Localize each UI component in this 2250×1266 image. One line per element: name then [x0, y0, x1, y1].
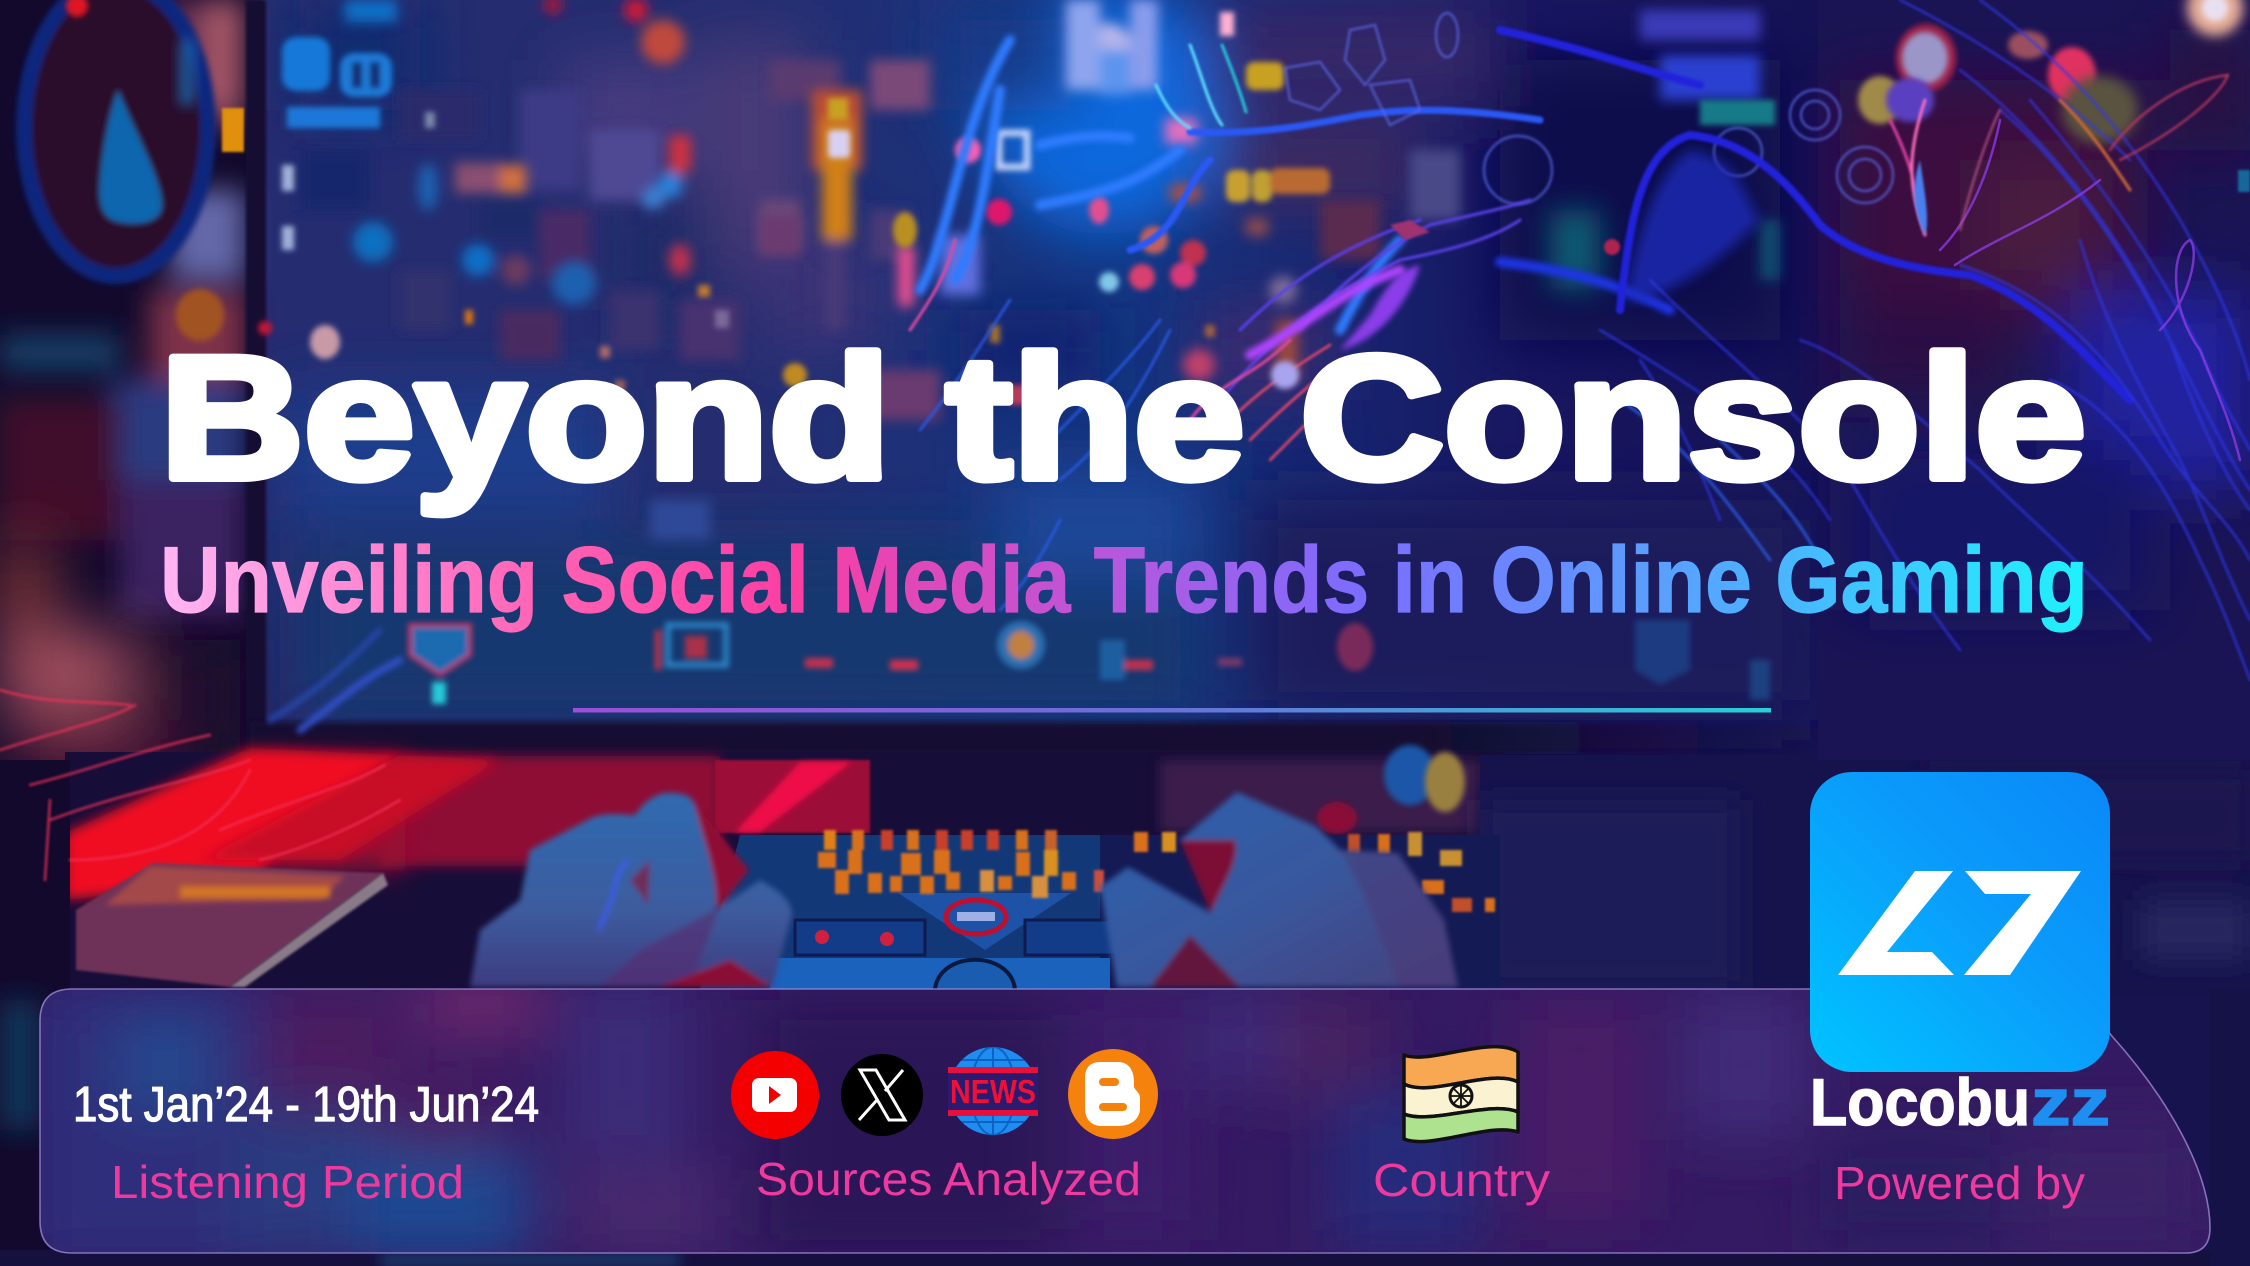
- maroon area at the upper right: [1818, 0, 2250, 760]
- label: sources analyzed: Sources Analyzed: [756, 1153, 1141, 1205]
- book on desk: [76, 863, 388, 987]
- icon: blogger: [1068, 1049, 1158, 1139]
- light strands: [0, 0, 2250, 880]
- right side desk: [1480, 755, 2250, 995]
- hand: right: [1100, 792, 1458, 987]
- icon: news globe: NEWS: [950, 1073, 1036, 1110]
- wordmark: locobuzz: Locobu: [1810, 1065, 2030, 1139]
- screen game icon row: [410, 620, 1770, 704]
- headphone ear cup: [24, 0, 208, 276]
- divider line: [573, 708, 1771, 712]
- icon: locobuzz logo: [1810, 772, 2110, 1072]
- dark bottom and left edge: [0, 760, 2250, 1266]
- monitor screen: [262, 0, 1842, 728]
- icon: youtube: [731, 1051, 819, 1139]
- icon: news globe: [948, 1047, 1038, 1135]
- label: powered by: Powered by: [1834, 1157, 2085, 1209]
- monitor frame: [246, 0, 1810, 754]
- colourful blobs in upper right: [1550, 10, 2138, 290]
- label: country: Country: [1373, 1154, 1550, 1206]
- date range: 1st Jan’24 - 19th Jun’24: [73, 1078, 539, 1132]
- head and headphone: [0, 0, 250, 800]
- hand: left: [470, 793, 792, 987]
- screen glowing spots: [258, 0, 1330, 540]
- keyboard: [700, 830, 1500, 989]
- label: listening period: Listening Period: [111, 1156, 464, 1208]
- screen bokeh texture: [300, 60, 1460, 360]
- icon: x: [841, 1054, 923, 1136]
- wordmark: locobuzz: zz: [2031, 1065, 2110, 1139]
- desk with red light: [65, 745, 1505, 992]
- panel: info bar: [30, 980, 2230, 1266]
- icon: india flag: [1404, 1047, 1518, 1142]
- title: Beyond the Console: [160, 321, 2086, 516]
